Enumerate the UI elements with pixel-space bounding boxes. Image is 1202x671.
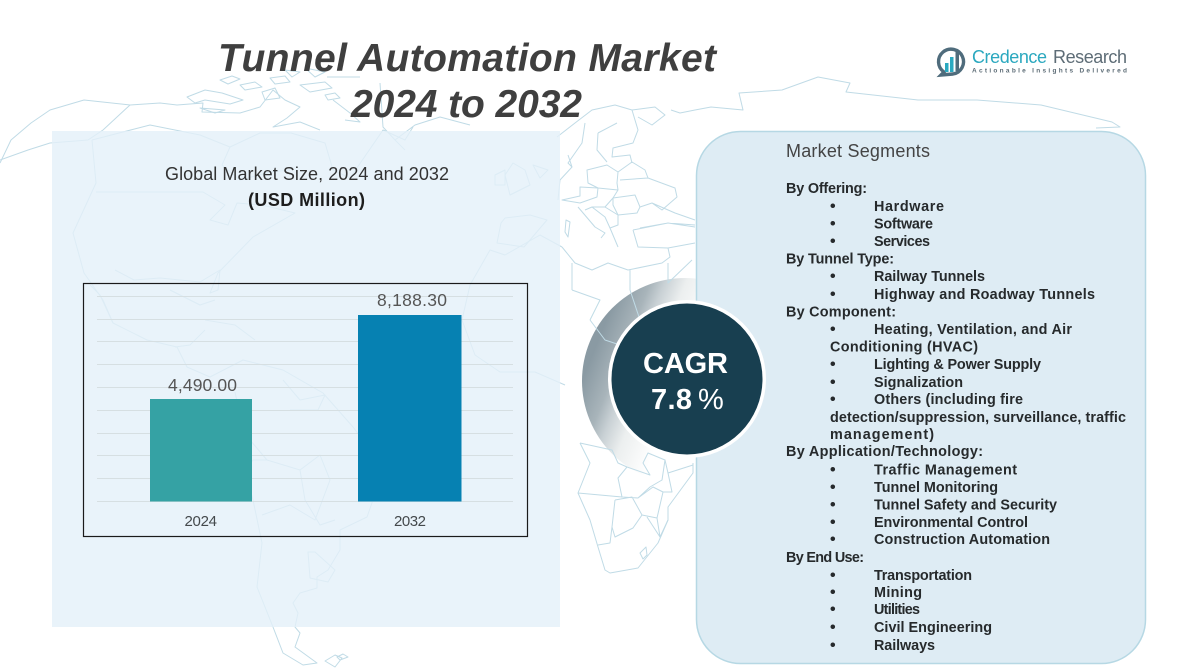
- segment: by tunnel type: By Tunnel Type:: [786, 252, 894, 268]
- segment: by offering: By Offering:: [786, 181, 867, 197]
- segment: by application/technology: •: [830, 462, 836, 478]
- heading: market segments: Market Segments: [786, 141, 930, 161]
- segment: by offering: •: [830, 216, 836, 232]
- segment: by offering: •: [830, 233, 836, 250]
- segment: by tunnel type: •: [830, 268, 836, 285]
- segment: by component: Conditioning (HVAC): [830, 340, 978, 356]
- value: 2032: 8,188.30: [377, 290, 447, 310]
- segment: by tunnel type: •: [830, 286, 836, 303]
- segment: by offering: •: [830, 198, 836, 215]
- CAGR badge: %: [698, 384, 724, 416]
- CAGR badge: CAGR: [643, 348, 728, 380]
- segment: by application/technology: •: [830, 531, 836, 548]
- segment: by tunnel type: [786, 252, 1095, 303]
- segment: by offering: Software: [874, 216, 933, 232]
- segment: by component: •: [830, 356, 836, 373]
- segment: by component: By Component:: [786, 304, 896, 320]
- segment: by application/technology: By Application/Technology:: [786, 444, 983, 460]
- segment: by component: Heating, Ventilation, and Air: [874, 322, 1072, 338]
- segment: by application/technology: •: [830, 479, 836, 496]
- value: 2024: 4,490.00: [168, 375, 237, 395]
- logo: Credence Research: Credence: [972, 47, 1047, 67]
- segment: by application/technology: Traffic Management: [874, 462, 1017, 478]
- segment: by application/technology: •: [830, 496, 836, 514]
- panel: market segments: [696, 132, 1146, 664]
- title: [218, 37, 718, 126]
- segment: by end use: Mining: [874, 585, 922, 601]
- segment: by application/technology: •: [830, 514, 836, 531]
- title: 2024 to 2032: [350, 83, 582, 126]
- chart heading: [165, 164, 449, 210]
- segment: by component: [786, 304, 1126, 443]
- segment: by offering: [786, 181, 944, 250]
- segment: by component: detection/suppression, surveillance, traffic: [830, 410, 1126, 426]
- segment: by component: Signalization: [874, 375, 963, 391]
- axis label: 2032: 2032: [394, 513, 426, 530]
- segment: by component: •: [830, 374, 836, 391]
- segment: by end use: Civil Engineering: [874, 620, 992, 636]
- segment: by application/technology: Tunnel Safety and Security: [874, 498, 1057, 514]
- CAGR badge: 7.8: [651, 384, 692, 416]
- icon: logo mark: [939, 49, 964, 75]
- segment: by application/technology: Tunnel Monitoring: [874, 480, 998, 496]
- segment: by end use: •: [830, 637, 836, 654]
- segment: by end use: [786, 550, 992, 654]
- segment: by component: Others (including fire: [874, 392, 1023, 408]
- axis label: 2024: 2024: [184, 513, 217, 530]
- segment: by tunnel type: Railway Tunnels: [874, 269, 985, 285]
- decorative crescent behind CAGR badge: [582, 278, 788, 484]
- logo: Credence Research: Research: [1053, 47, 1127, 67]
- segment: by end use: By End Use:: [786, 550, 864, 566]
- segment: by component: •: [830, 321, 836, 338]
- chart heading: Global Market Size, 2024 and 2032: [165, 164, 449, 184]
- segment: by application/technology: Environmental Control: [874, 515, 1028, 531]
- segment: by application/technology: [786, 444, 1057, 548]
- segment: by end use: •: [830, 567, 836, 584]
- segment: by component: Lighting & Power Supply: [874, 357, 1041, 373]
- segment: by offering: Services: [874, 234, 930, 250]
- segment: by tunnel type: Highway and Roadway Tunnels: [874, 287, 1095, 303]
- segment: by end use: Utilities: [874, 602, 920, 618]
- segment: by application/technology: Construction Automation: [874, 532, 1050, 548]
- bar: 2032: [358, 315, 462, 502]
- logo: Credence Research: Actionable Insights Delivered: [972, 68, 1127, 74]
- bar chart: [84, 284, 528, 536]
- chart heading: (USD Million): [248, 190, 365, 210]
- segment: by end use: Railways: [874, 638, 935, 654]
- segment: by component: •: [830, 391, 836, 408]
- logo: Credence Research: [939, 47, 1127, 75]
- segment: by end use: •: [830, 619, 836, 636]
- segment: by end use: Transportation: [874, 568, 972, 584]
- segment: by offering: Hardware: [874, 199, 944, 215]
- panel: global market size: [52, 131, 560, 627]
- segment: by end use: •: [830, 584, 836, 601]
- segment: by component: management): [830, 427, 934, 443]
- title: Tunnel Automation Market: [218, 37, 718, 80]
- market segments text: [786, 141, 1126, 654]
- CAGR badge: [608, 300, 766, 458]
- bar: 2024: [150, 399, 252, 502]
- segment: by end use: •: [830, 601, 836, 618]
